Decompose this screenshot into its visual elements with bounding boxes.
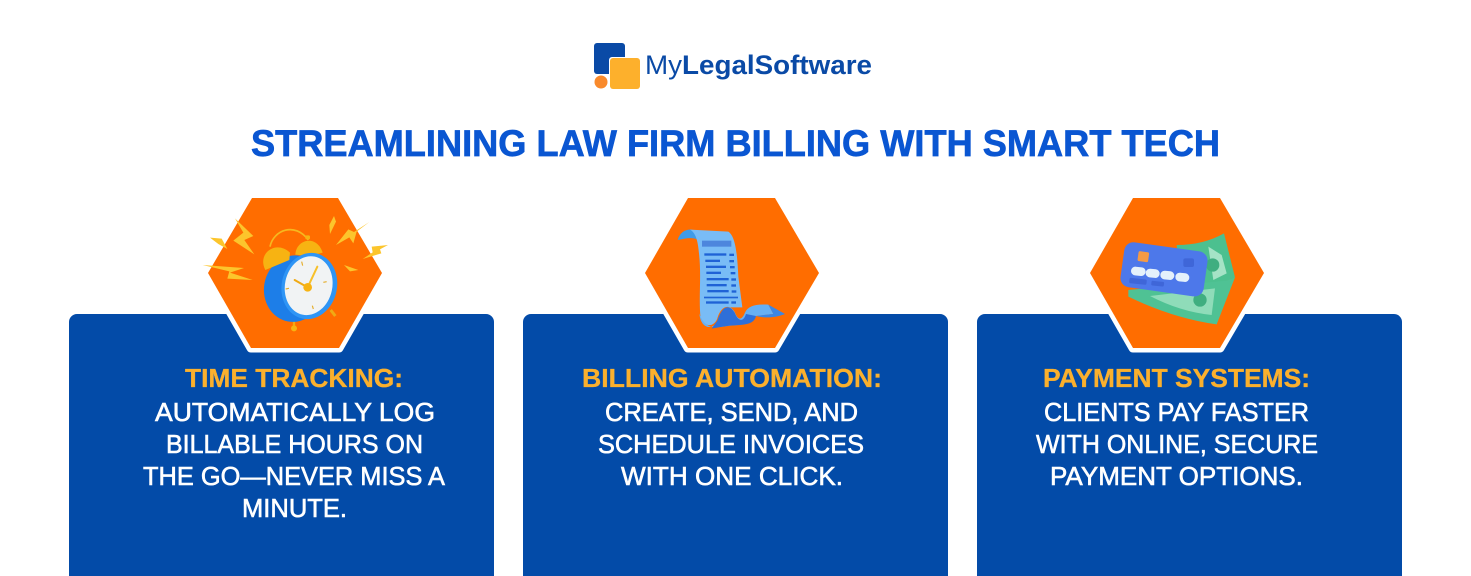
hexagon badge xyxy=(645,198,819,348)
text: billing automation: CREATE, SEND, AND xyxy=(605,397,858,427)
text: payment systems: CLIENTS PAY FASTER xyxy=(1044,397,1309,427)
text: payment systems: PAYMENT SYSTEMS: xyxy=(1043,363,1310,393)
panel: time tracking xyxy=(69,198,494,576)
panel: billing automation xyxy=(523,198,948,576)
text: payment systems: WITH ONLINE, SECURE xyxy=(1036,429,1318,459)
card background xyxy=(69,314,494,576)
icon: alarm clock xyxy=(203,216,388,331)
text: time tracking: THE GO—NEVER MISS A xyxy=(143,461,446,491)
panel: payment systems xyxy=(977,198,1402,576)
text: billing automation: BILLING AUTOMATION: xyxy=(582,363,882,393)
text: payment systems: PAYMENT OPTIONS. xyxy=(1050,461,1303,491)
hexagon badge xyxy=(208,198,382,348)
text: billing automation xyxy=(582,363,882,491)
logo mark xyxy=(594,43,641,90)
icon: invoice receipt xyxy=(678,230,785,329)
logo wordmark: MyLegalSoftware xyxy=(645,50,872,80)
text: time tracking: AUTOMATICALLY LOG xyxy=(155,397,435,427)
text: payment systems xyxy=(1036,363,1318,491)
hexagon badge xyxy=(1090,198,1264,348)
text: time tracking xyxy=(143,363,446,523)
text: billing automation: WITH ONE CLICK. xyxy=(621,461,843,491)
text: billing automation: SCHEDULE INVOICES xyxy=(598,429,864,459)
card background xyxy=(977,314,1402,576)
logo xyxy=(594,43,872,90)
card background xyxy=(523,314,948,576)
text: time tracking: BILLABLE HOURS ON xyxy=(166,429,423,459)
text: time tracking: TIME TRACKING: xyxy=(185,363,403,393)
title: STREAMLINING LAW FIRM BILLING WITH SMART TECH xyxy=(251,123,1220,164)
icon: credit card and cash xyxy=(1119,233,1235,324)
text: time tracking: MINUTE. xyxy=(242,493,347,523)
